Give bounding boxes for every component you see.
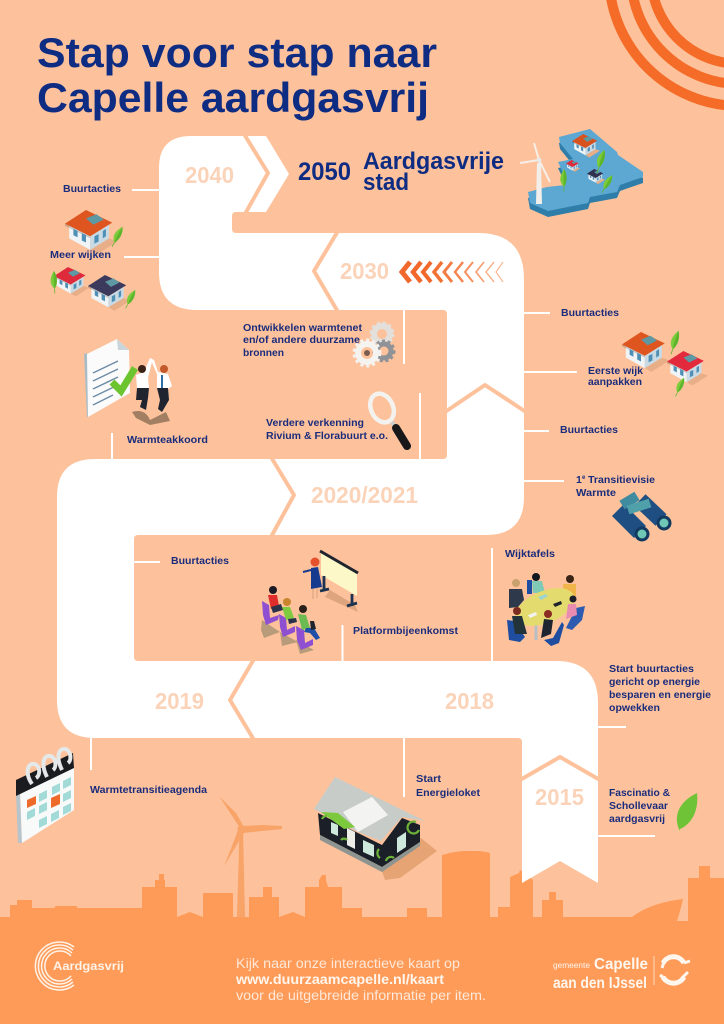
- label: Verdere verkenning: Rivium & Florabuurt e.o.: [266, 430, 388, 442]
- icon: gears: [354, 323, 394, 366]
- year 2015: 2015: [535, 784, 584, 810]
- connector lines: [91, 190, 655, 836]
- logo: gemeente Capelle aan den IJssel: aan den IJssel: [553, 975, 647, 992]
- year 2018: 2018: [445, 688, 494, 714]
- logo: gemeente Capelle aan den IJssel: gemeente: [553, 961, 591, 970]
- footer text: www.duurzaamcapelle.nl/kaart: [235, 972, 445, 987]
- icon: house with dark roof: [88, 275, 130, 311]
- icon: leaf Fascinatio: [677, 793, 697, 831]
- footer text: voor de uitgebreide informatie per item.: [236, 988, 486, 1003]
- icon: calendar: [16, 749, 74, 843]
- label: Start Energieloket: Start: [416, 773, 442, 785]
- label: Start buurtacties: [609, 663, 711, 714]
- label: Verdere verkenning: Verdere verkenning: [266, 417, 364, 429]
- logo: Aardgasvrij: Aardgasvrij: [53, 959, 124, 973]
- footer text: [235, 956, 486, 1003]
- heading: Aardgasvrije stad: stad: [363, 169, 409, 196]
- label: Start Energieloket: [416, 773, 481, 799]
- label: Buurtacties 2020: Buurtacties: [560, 424, 618, 436]
- icon: leaf: [111, 225, 124, 248]
- label: Wijktafels: Wijktafels: [505, 548, 555, 560]
- label: Fascinatio & Schollevaar aardgasvrij: aardgasvrij: [609, 813, 665, 825]
- route chevron separators: [230, 134, 600, 780]
- title: Stap voor stap naar: [37, 29, 437, 76]
- label: Ontwikkelen warmtenet: [243, 322, 362, 359]
- icon: large house orange roof right: [622, 332, 670, 372]
- logo: gemeente Capelle aan den IJssel: [553, 956, 690, 992]
- label: Warmteakkoord: Warmteakkoord: [127, 434, 208, 446]
- icon: house with red roof: [54, 267, 89, 296]
- icon: meeting at round table: [507, 573, 585, 646]
- year 2040: 2040: [185, 162, 234, 188]
- road: white winding route: [57, 136, 598, 883]
- icon: map of Capelle with houses and turbine: [520, 129, 643, 217]
- label: Verdere verkenning: [266, 417, 388, 442]
- label: 1e Transitievisie Warmte: Transitievisie: [588, 474, 655, 486]
- icon: binoculars: [618, 496, 670, 540]
- label: Buurtacties 2030: Buurtacties: [561, 307, 619, 319]
- label: 1e Transitievisie Warmte: Warmte: [576, 487, 616, 499]
- year 2020/2021: 2020/2021: [311, 482, 418, 508]
- label: Eerste wijk aanpakken: Eerste wijk: [588, 365, 643, 377]
- label: Fascinatio & Schollevaar aardgasvrij: Fascinatio &: [609, 787, 670, 799]
- label: 1e Transitievisie Warmte: [576, 474, 655, 499]
- year 2030: 2030: [340, 258, 389, 284]
- label: 1e Transitievisie Warmte: 1: [576, 474, 582, 486]
- label: Ontwikkelen warmtenet: bronnen: [243, 347, 284, 359]
- icon: red house right: [667, 351, 708, 385]
- label: Start Energieloket: Energieloket: [416, 787, 481, 799]
- label: Buurtacties: Buurtacties: [63, 183, 121, 195]
- label: Ontwikkelen warmtenet: en/of andere duurzame: [243, 334, 360, 346]
- label: Eerste wijk aanpakken: [588, 365, 643, 388]
- arrow: fading chevrons pointing left: [402, 262, 503, 282]
- label: Start buurtacties: Start buurtacties: [609, 663, 694, 675]
- year 2050: 2050: [298, 158, 351, 186]
- icon: document and high-five people: [84, 339, 172, 425]
- footer text: Kijk naar onze interactieve kaart op: [236, 956, 460, 971]
- title: Capelle aardgasvrij: [37, 74, 429, 121]
- logo: gemeente Capelle aan den IJssel: Capelle: [594, 956, 648, 973]
- label: Warmtetransitieagenda: Warmtetransitieagenda: [90, 784, 207, 796]
- heading: Aardgasvrije stad: Aardgasvrije: [363, 148, 504, 175]
- label: Platformbijeenkomst: Platformbijeenkomst: [353, 625, 459, 637]
- icon: wind turbine: [219, 796, 282, 917]
- decorative rings top right: [609, 0, 724, 106]
- label: Meer wijken: Meer wijken: [50, 249, 111, 261]
- label: Fascinatio & Schollevaar aardgasvrij: [609, 787, 670, 825]
- label: 1e Transitievisie Warmte: e: [582, 475, 586, 481]
- title: [37, 29, 437, 121]
- icon: leaves near houses: [48, 271, 136, 310]
- label: Start buurtacties: besparen en energie: [609, 689, 711, 701]
- label: Ontwikkelen warmtenet: Ontwikkelen warmtenet: [243, 322, 362, 334]
- logo: Aardgasvrij: [35, 942, 124, 990]
- label: Start buurtacties: opwekken: [609, 702, 660, 714]
- icon: Energieloket house: [314, 777, 437, 880]
- label: Start buurtacties: gericht op energie: [609, 676, 700, 688]
- label: Buurtacties 2019: Buurtacties: [171, 555, 229, 567]
- icon: house with orange roof: [65, 210, 118, 254]
- skyline and footer band: [0, 851, 724, 1024]
- label: Eerste wijk aanpakken: aanpakken: [588, 376, 642, 388]
- heading: Aardgasvrije stad: [363, 148, 504, 196]
- icon: magnifying glass: [366, 390, 407, 446]
- icon: presentation with audience: [261, 551, 358, 654]
- label: Fascinatio & Schollevaar aardgasvrij: Schollevaar: [609, 800, 668, 812]
- icon: leaves right: [670, 330, 685, 398]
- year 2019: 2019: [155, 688, 204, 714]
